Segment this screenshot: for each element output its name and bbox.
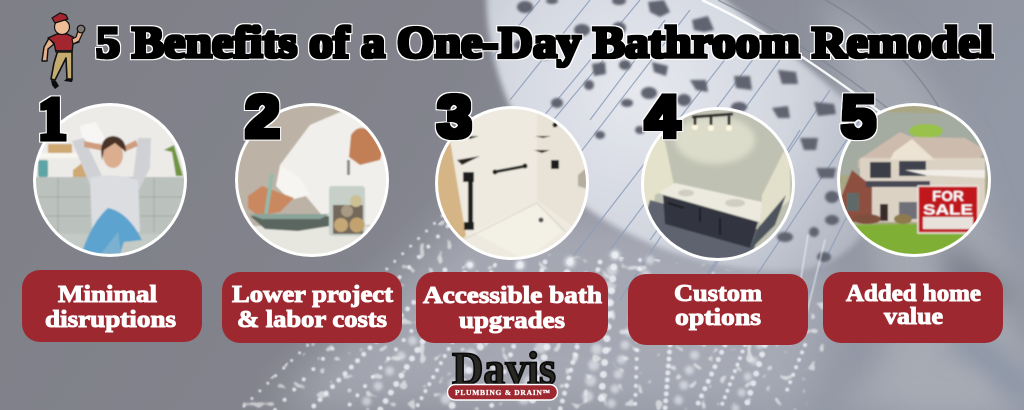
shower handle and outer ring	[825, 0, 1024, 410]
spray: droplet streaks	[240, 165, 825, 410]
number 2: 2	[245, 84, 280, 150]
label 4: options	[675, 305, 761, 331]
benefit 5	[823, 84, 1003, 343]
face	[54, 20, 70, 34]
label 2: & labor costs	[237, 307, 387, 333]
number 3: 3	[437, 84, 472, 150]
photo: relaxing woman	[30, 100, 190, 264]
number 5: 5	[841, 84, 876, 150]
badge	[448, 384, 558, 400]
label 3	[416, 272, 608, 343]
label 5: Added home	[846, 281, 981, 307]
label 2	[222, 272, 402, 343]
cap	[52, 13, 68, 23]
label 3: upgrades	[459, 308, 565, 334]
wordmark: Davis	[452, 343, 556, 395]
label 5	[823, 272, 1003, 343]
title: 5 Benefits of a One-Day Bathroom Remodel	[96, 18, 993, 67]
photo: house for sale: SALE	[923, 202, 973, 218]
label 4	[628, 274, 808, 345]
number 4: 4	[645, 84, 680, 150]
nozzle ridges	[490, 0, 885, 330]
label 5: value	[884, 304, 943, 330]
spray glow	[270, 200, 840, 410]
left arm	[42, 38, 54, 61]
photo: house for sale	[837, 103, 991, 257]
photo: house for sale: FOR	[932, 188, 964, 205]
label 1: disruptions	[45, 307, 176, 333]
label 2: Lower project	[232, 282, 393, 308]
label 4: Custom	[674, 281, 762, 307]
mascot	[42, 13, 85, 89]
logo: Davis Plumbing & Drain	[448, 343, 558, 400]
label 1	[22, 270, 202, 342]
spray: droplet noise	[235, 190, 840, 410]
label 3: Accessible bath	[423, 283, 602, 309]
benefit 2	[222, 84, 402, 343]
photo: accessible shower	[435, 106, 589, 260]
photo: coins in a jar	[235, 103, 389, 257]
benefit 1	[22, 86, 202, 342]
badge text: PLUMBING & DRAIN™	[455, 388, 550, 397]
nozzle holes	[514, 0, 839, 262]
spray: soft droplet bokeh	[360, 255, 760, 410]
shirt	[48, 34, 79, 52]
label 1: Minimal	[58, 282, 157, 308]
benefit 3	[416, 84, 608, 343]
number 1: 1	[38, 86, 67, 152]
benefit 4	[628, 84, 808, 345]
belt	[56, 50, 72, 52]
photo: double vanity	[641, 107, 795, 261]
shower head face	[486, 0, 900, 330]
legs	[51, 50, 72, 80]
shoes	[51, 79, 73, 89]
fist	[77, 25, 85, 33]
right arm	[72, 28, 84, 44]
